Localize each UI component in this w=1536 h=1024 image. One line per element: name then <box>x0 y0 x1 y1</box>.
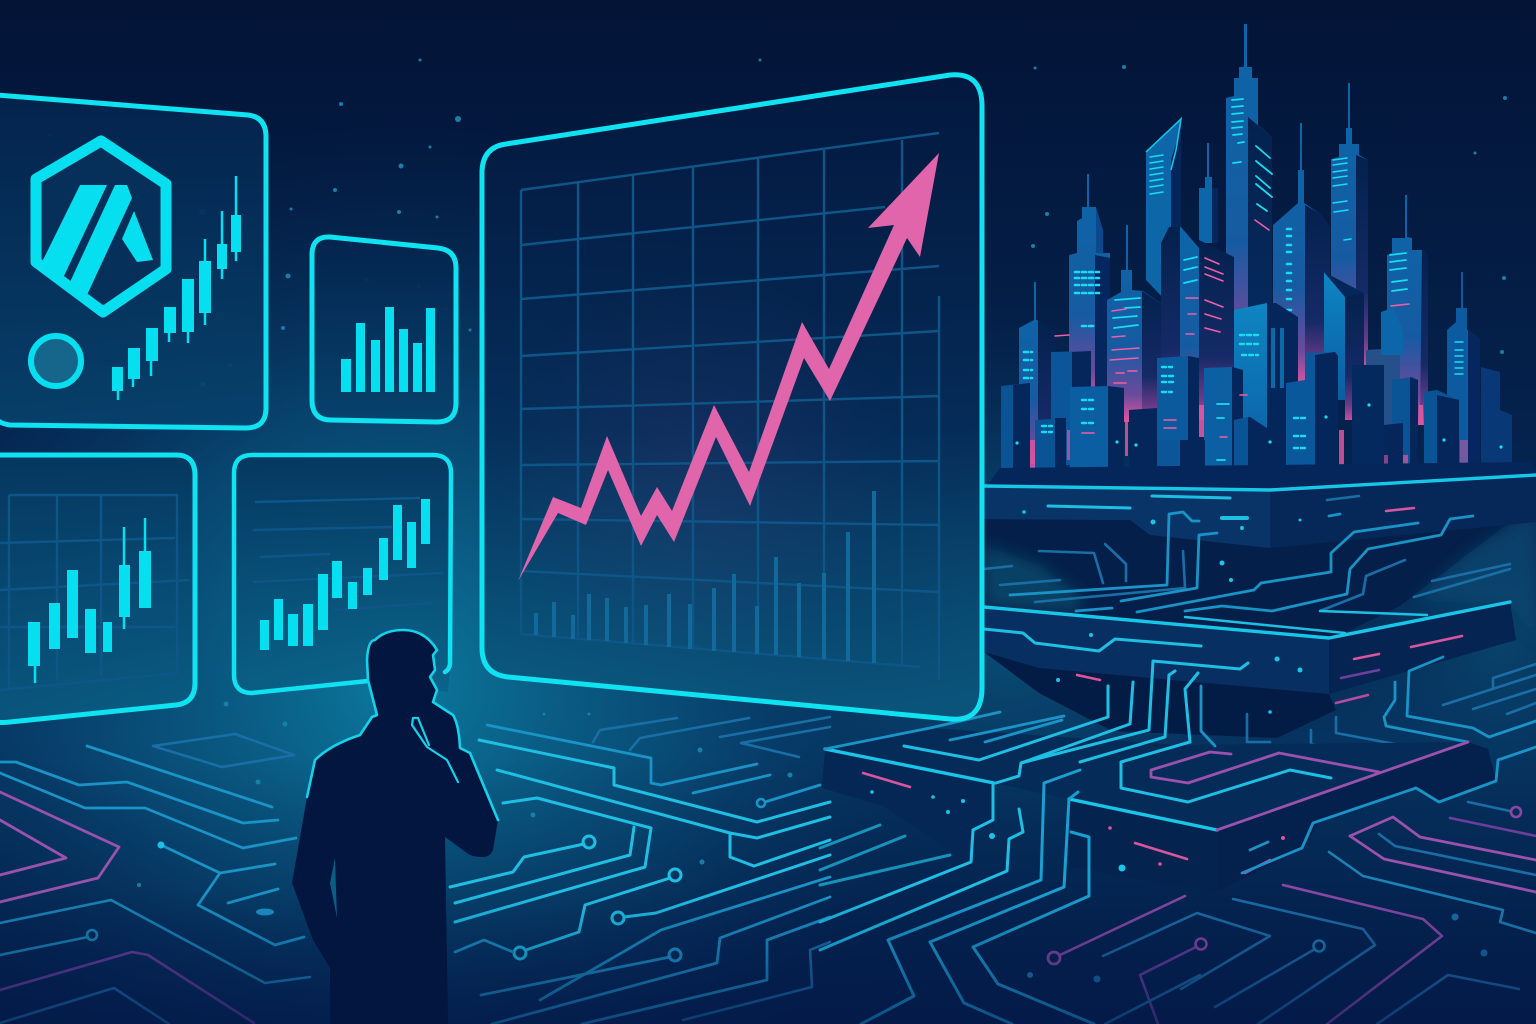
chart grid <box>520 133 939 680</box>
person silhouette <box>292 630 498 1024</box>
right circuit floor traces <box>1027 664 1536 1024</box>
lower darkening fade <box>0 890 1536 1024</box>
bar chart <box>260 499 430 650</box>
panel: logo and candles <box>0 95 266 428</box>
volume bars <box>536 491 874 663</box>
city skyline <box>988 24 1536 488</box>
chart grid <box>253 498 443 610</box>
candlestick chart <box>28 518 151 683</box>
ground <box>988 462 1536 488</box>
panel: small bar chart <box>312 237 456 422</box>
pink base glows <box>1030 405 1468 475</box>
icon: Arbitrum hexagon logo <box>36 141 166 312</box>
chart grid <box>0 495 190 690</box>
candlestick chart <box>112 176 241 400</box>
star particles <box>48 58 1507 887</box>
left circuit traces <box>0 734 310 1024</box>
bar chart <box>341 307 435 392</box>
pink growth arrow <box>518 153 939 581</box>
front windows <box>1015 335 1503 478</box>
floating platform top <box>984 475 1536 640</box>
front blocks <box>1001 303 1512 484</box>
windows on back towers <box>1024 99 1463 394</box>
collar highlight <box>412 718 458 782</box>
panel: main growth chart <box>482 75 982 719</box>
rim light <box>307 630 498 820</box>
centre circuit traces <box>450 717 830 1024</box>
back towers <box>1019 24 1480 475</box>
panel: lower left candles <box>0 455 195 722</box>
gap between arm and body <box>330 858 337 918</box>
floating platform middle <box>984 602 1536 760</box>
icon: status circle <box>31 336 81 386</box>
slab traces and lower slabs <box>820 661 1536 1024</box>
panel: lower middle bars <box>234 455 451 693</box>
panel border <box>482 75 982 719</box>
